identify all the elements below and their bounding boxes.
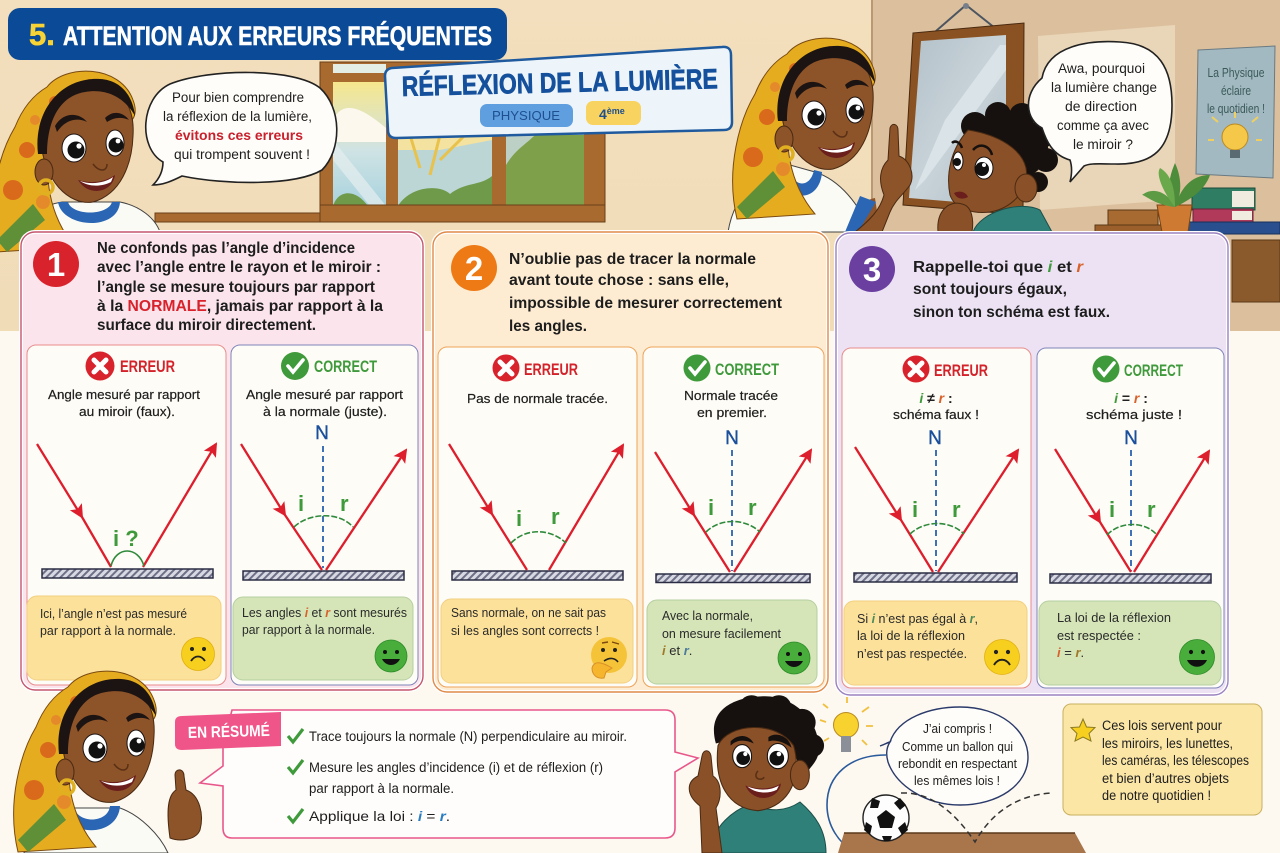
grade pill [586,101,641,125]
diagram: normale tracée: N [725,428,739,449]
speech bubble: boy bottom: J’ai compris ! [923,721,992,736]
panel: erreur 2 [433,232,828,692]
sub-panel: erreur [842,348,1031,688]
sub-panel: correct: Angle mesuré par rapport [246,387,403,402]
note: Si i n’est pas égal à r, [857,611,978,626]
diagram: i différent de r: N [928,428,942,449]
character: boy top right [938,102,1058,232]
instruction text 1: à la NORMALE, jamais par rapport à la [97,298,383,315]
speech bubble: boy bottom [880,707,1028,805]
window [155,62,605,222]
icon: thinking face [591,637,627,678]
diagram: i égal r: r [1147,497,1156,522]
instruction text 1: avec l’angle entre le rayon et le miroir : [97,259,381,276]
poster: physics [1196,46,1275,178]
note text: les miroirs, les lunettes, [1102,736,1233,751]
icon: happy face [1180,640,1214,674]
summary list: Trace toujours la normale (N) perpendiculaire au miroir. [309,729,627,744]
instruction text 3: sinon ton schéma est faux. [913,304,1110,321]
number badge 2 [451,245,497,291]
icon: sad face [182,638,214,670]
note [1039,601,1221,685]
speech bubble: boy top [1028,42,1172,182]
icon: lightbulb [820,697,873,752]
header banner [8,8,507,60]
sub-panel: erreur: au miroir (faux). [79,404,175,419]
sub-panel: correct: Normale tracée [684,388,778,403]
instruction text 2: avant toute chose : sans elle, [509,272,729,289]
icon: happy face [375,640,407,672]
speech bubble: boy top: Awa, pourquoi [1058,61,1145,76]
badge: en résumé [175,712,281,750]
diagram: sans normale: r [551,504,560,529]
diagram: i égal r [1050,428,1211,583]
sub-panel: erreur: ERREUR [524,360,578,379]
note [27,596,221,680]
sub-panel: correct: CORRECT [314,357,377,376]
instruction text 3: Rappelle-toi que i et r [913,259,1084,276]
speech bubble: Awa top: évitons ces erreurs [175,128,303,143]
diagram: i égal r: i [1109,497,1115,522]
title text: RÉFLEXION DE LA LUMIÈRE [401,63,718,102]
diagram: i différent de r [854,428,1018,582]
speech bubble: boy bottom: Comme un ballon qui [902,739,1013,754]
callout: star note [1063,704,1262,815]
sub-panel: correct [643,347,824,687]
sub-panel: correct: CORRECT [715,360,779,379]
summary list: Applique la loi : i = r. [309,808,450,824]
sub-panel: erreur: schéma faux ! [893,407,979,422]
sub-panel: erreur: Angle mesuré par rapport [48,387,200,402]
note: par rapport à la normale. [40,623,176,638]
note [441,599,633,683]
icon: football [863,795,909,841]
icon: cross [492,354,520,382]
sub-panel: erreur: ERREUR [934,361,988,380]
instruction text 2: N’oublie pas de tracer la normale [509,251,756,268]
sub-panel: correct: en premier. [697,405,767,420]
speech bubble: boy top: comme ça avec [1057,118,1149,133]
panel: erreur 3 [836,233,1228,695]
sub-panel: correct [1037,348,1224,688]
icon: cross [86,352,114,380]
header banner: ATTENTION AUX ERREURS FRÉQUENTES [63,20,492,51]
character: Awa top right [728,38,912,232]
title card [385,47,732,138]
diagram: angle à la normale [241,423,406,580]
diagram: sans normale [449,444,623,580]
note: i = r. [1057,645,1084,660]
icon: poster bulb [1208,112,1262,158]
icon: check [1092,356,1120,382]
note: Sans normale, on ne sait pas [451,605,606,620]
note: par rapport à la normale. [242,622,375,637]
note text: de notre quotidien ! [1102,788,1211,803]
grade pill: ème [607,106,625,116]
note text: les caméras, les télescopes [1102,753,1249,768]
diagram: i différent de r: r [952,497,961,522]
instruction text 1 [97,240,383,334]
icon: check [281,352,309,380]
diagram: i égal r: N [1124,428,1138,449]
subject pill: PHYSIQUE [492,108,560,123]
note: est respectée : [1057,628,1141,643]
speech bubble: boy top: le miroir ? [1073,137,1133,152]
note: n’est pas respectée. [857,646,967,661]
icon: star [1071,719,1095,741]
diagram: angle à la normale: r [340,491,349,516]
diagram: angle à la normale: i [298,491,304,516]
sub-panel: erreur: i ≠ r : [919,390,953,406]
mirror [903,3,1024,215]
instruction text 2 [509,251,782,335]
speech bubble: boy top: de direction [1065,99,1137,114]
diagram: sans normale: i [516,506,522,531]
grade pill: 4 [599,106,607,122]
note: on mesure facilement [662,626,781,641]
speech bubble: boy top: la lumière change [1051,80,1157,95]
diagram: normale tracée: r [748,495,757,520]
note text [1102,718,1249,803]
instruction text 1: Ne confonds pas l’angle d’incidence [97,240,355,257]
shelf with books and plant [1095,163,1280,302]
character: boy bottom [689,695,826,853]
note: Ici, l’angle n’est pas mesuré [40,606,187,621]
diagram: normale tracée: i [708,495,714,520]
ball and bounce scene [827,755,1086,853]
number badge 3: 3 [863,251,881,288]
instruction text 2: impossible de mesurer correctement [509,295,782,312]
diagram: normale tracée [655,428,811,582]
panel: en résumé [175,710,698,838]
poster: physics: éclaire [1221,84,1251,98]
note text: et bien d’autres objets [1102,771,1229,786]
poster: physics: La Physique [1208,66,1265,80]
icon: check [684,354,710,382]
character: Awa bottom [14,671,201,853]
sub-panel: correct: i = r : [1114,390,1148,406]
summary list: par rapport à la normale. [309,781,454,796]
note [647,600,817,684]
diagram: i différent de r: i [912,497,918,522]
badge: en résumé: EN RÉSUMÉ [188,721,270,742]
note: i et r. [662,643,692,658]
summary list: Mesure les angles d’incidence (i) et de réflexion (r) [309,760,603,775]
sub-panel: correct: à la normale (juste). [263,404,387,419]
instruction text 2: les angles. [509,318,587,335]
sub-panel: correct: CORRECT [1124,361,1183,380]
sub-panel: erreur [438,347,637,687]
note [233,597,413,680]
poster patch on wall [1038,25,1175,210]
sub-panel: correct: schéma juste ! [1086,407,1182,422]
sub-panel: erreur: ERREUR [120,357,175,376]
speech bubble: Awa top: Pour bien comprendre [172,90,304,105]
speech bubble: Awa top: qui trompent souvent ! [174,147,310,162]
diagram: angle au miroir: i ? [113,526,139,551]
note: la loi de la réflexion [857,628,965,643]
number badge 1 [33,241,79,287]
note: Avec la normale, [662,608,753,623]
character: Awa top left [0,71,160,252]
arrow: ball bounce trajectory [901,793,1052,842]
speech bubble: boy bottom: rebondit en respectant [898,756,1017,771]
summary list [288,729,627,824]
header banner: 5. [29,17,55,52]
sub-panel: erreur [27,345,226,685]
instruction text 1: surface du miroir directement. [97,317,316,334]
icon: happy face [778,642,810,674]
note: La loi de la réflexion [1057,610,1171,625]
icon: plant [1142,163,1210,232]
number badge 2: 2 [465,250,483,287]
icon: sad face [984,640,1020,674]
sub-panel: correct [231,345,418,685]
note text: Ces lois servent pour [1102,718,1222,733]
instruction text 3: sont toujours égaux, [913,281,1067,298]
icon: cross [902,356,930,382]
speech bubble: Awa top [146,72,337,185]
number badge 1: 1 [47,246,65,283]
sub-panel: erreur: Pas de normale tracée. [467,391,608,406]
subject pill [480,104,573,127]
diagram: angle au miroir [37,444,216,578]
number badge 3 [849,246,895,292]
panel: erreur 1 [21,232,423,690]
note: Les angles i et r sont mesurés [242,605,407,620]
note: si les angles sont corrects ! [451,623,599,638]
note [844,601,1027,685]
diagram: angle à la normale: N [315,423,329,444]
instruction text 3 [913,259,1110,321]
poster: physics: le quotidien ! [1207,102,1265,116]
instruction text 1: l’angle se mesure toujours par rapport [97,279,375,296]
speech bubble: Awa top: la réflexion de la lumière, [163,109,312,124]
speech bubble: boy bottom: les mêmes lois ! [914,773,1000,788]
